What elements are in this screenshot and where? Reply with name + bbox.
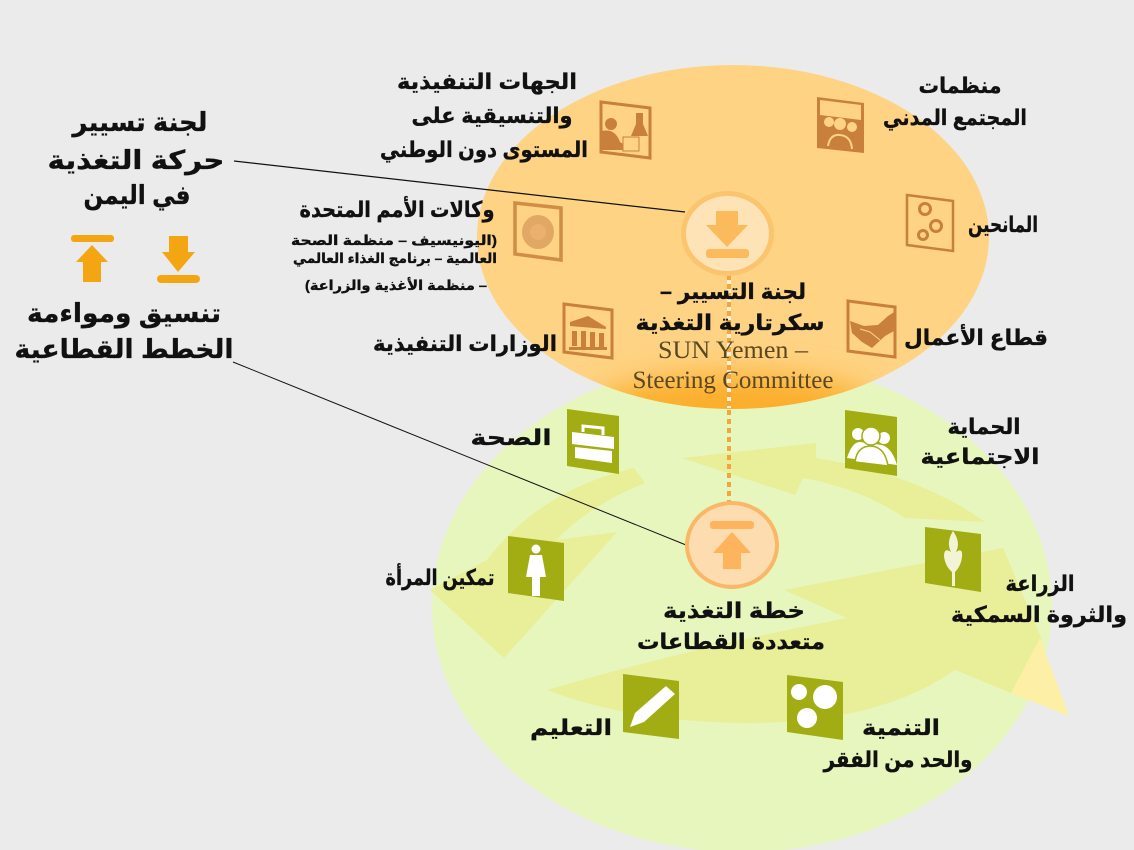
heading: left harmonisation: الخطط القطاعية: [14, 334, 234, 364]
heading: left committee: في اليمن: [84, 180, 190, 211]
label: civil society: المجتمع المدني: [883, 105, 1027, 131]
label: steering committee: Steering Committee: [632, 367, 834, 394]
label: development: التنمية: [862, 715, 940, 740]
label: UN agencies: [291, 195, 497, 293]
label: health: الصحة: [470, 425, 552, 450]
label: social protection: الحماية: [948, 414, 1020, 439]
label: business: قطاع الأعمال: [904, 323, 1048, 350]
icon: donors: [907, 195, 953, 251]
label: UN agencies: العالمية – برنامج الغذاء العالمي: [293, 251, 497, 266]
label: steering committee: سكرتارية التغذية: [636, 310, 824, 336]
label: steering committee: لجنة التسيير –: [660, 279, 806, 305]
label: civil society: منظمات: [918, 73, 1002, 98]
heading: left committee: [48, 107, 224, 211]
icon: development circles: [787, 675, 843, 740]
label: agriculture: والثروة السمكية: [951, 602, 1127, 628]
cycle arrows: [430, 443, 1042, 723]
label: women: تمكين المرأة: [386, 562, 494, 591]
icon: ministries bank: [564, 304, 612, 358]
speech tail: [1011, 638, 1069, 716]
icon: business handshake: [848, 301, 895, 357]
label: agriculture: الزراعة: [1006, 571, 1074, 597]
label: development: والحد من الفقر: [823, 747, 972, 773]
leader line: plans: [233, 362, 686, 545]
icon: left upload arrow: [71, 235, 114, 282]
label: social protection: الاجتماعية: [920, 444, 1040, 469]
heading: left harmonisation: [14, 298, 234, 364]
icon: left download arrow: [157, 236, 200, 283]
label: UN agencies: – منظمة الأغذية والزراعة): [305, 277, 488, 293]
label: sub-national: [380, 69, 588, 163]
label: education: التعليم: [530, 715, 612, 740]
label: civil society: [883, 73, 1027, 131]
label: donors: المانحين: [968, 212, 1038, 238]
heading: left committee: لجنة تسيير: [71, 107, 208, 138]
label: UN agencies: (اليونيسيف – منظمة الصحة: [291, 233, 497, 248]
label: steering committee: [632, 279, 834, 394]
label: social protection: [920, 414, 1040, 469]
leader line: committee: [234, 161, 685, 212]
label: agriculture: [951, 571, 1127, 628]
icon: sub-national coordination: [601, 102, 650, 158]
label: sub-national: والتنسيقية على: [412, 103, 572, 129]
icon: civil society: [817, 97, 864, 153]
icon: agriculture wheat: [925, 527, 981, 592]
label: steering committee: SUN Yemen –: [658, 337, 809, 364]
heading: left committee: حركة التغذية: [48, 145, 224, 176]
label: nutrition plan: متعددة القطاعات: [637, 629, 825, 654]
panel: green multi-sector ellipse: [432, 360, 1052, 850]
panel: orange steering ellipse: [477, 65, 989, 438]
dotted connector: [727, 275, 731, 502]
label: sub-national: المستوى دون الوطني: [380, 137, 588, 163]
icon: education pencil: [623, 674, 679, 739]
icon: social protection: [845, 410, 897, 476]
label: nutrition plan: [637, 598, 825, 654]
icon: health: [567, 409, 619, 474]
icon: lower upload circle: [687, 503, 777, 587]
icon: top download circle: [684, 194, 772, 274]
icon: woman: [508, 536, 564, 601]
label: nutrition plan: خطة التغذية: [663, 598, 805, 623]
label: UN agencies: وكالات الأمم المتحدة: [300, 195, 494, 223]
label: ministries: الوزارات التنفيذية: [373, 331, 557, 357]
icon: UN emblem: [515, 203, 561, 260]
label: development: [823, 715, 972, 773]
heading: left harmonisation: تنسيق ومواءمة: [27, 298, 221, 329]
label: sub-national: الجهات التنفيذية: [397, 69, 577, 95]
